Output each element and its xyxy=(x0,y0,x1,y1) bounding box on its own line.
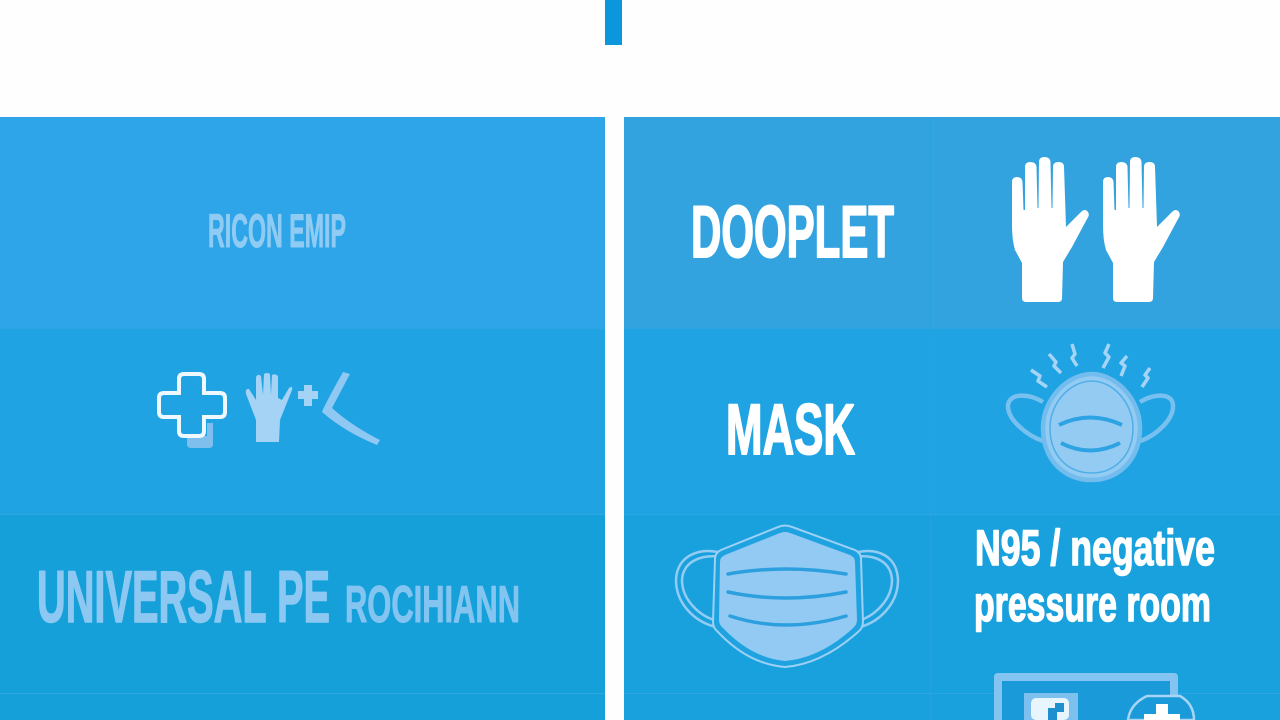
right row 1 background xyxy=(624,117,1280,328)
icon: mask folds xyxy=(1059,418,1122,450)
text: N95 and negative pressure room xyxy=(974,520,1215,632)
icon: hand xyxy=(246,373,292,442)
icon: mask pleats xyxy=(728,569,846,625)
heading: mask: MASK xyxy=(726,391,855,470)
left row 2 background xyxy=(0,328,605,514)
left row 3 background xyxy=(0,514,605,693)
right row 2 background xyxy=(624,328,1280,514)
icon group: cross, hand, plus and arm xyxy=(159,372,380,448)
icon: mask body xyxy=(719,532,857,661)
panel: right column xyxy=(624,117,1280,720)
left row 1 background xyxy=(0,117,605,328)
icon: ear straps xyxy=(676,551,898,627)
panel: left column: RICON EMIP xyxy=(208,204,346,257)
icon: surgical mask xyxy=(676,526,898,667)
icon: shadow square xyxy=(187,423,213,448)
right row 4 background xyxy=(624,693,1280,720)
icon: pair of gloves xyxy=(1012,157,1180,302)
top centre tab xyxy=(605,0,622,45)
icon: left glove xyxy=(1012,157,1089,302)
icon: respirator with vapour xyxy=(1008,344,1173,480)
icon: ear loops xyxy=(1008,396,1173,441)
panel: left column xyxy=(0,117,605,720)
left row 4 background xyxy=(0,693,605,720)
heading: smaller faded word: ROCIHIANN xyxy=(345,576,520,634)
heading: universal precautions: UNIVERSAL PE xyxy=(37,557,330,638)
right row 3 background xyxy=(624,514,1280,693)
icon: vapour squiggles xyxy=(1031,344,1150,387)
icon: mask body xyxy=(1043,374,1140,480)
heading: droplet: DOOPLET xyxy=(691,192,894,273)
icon: picture tile xyxy=(1024,693,1078,720)
icon: boomerang arm xyxy=(322,372,380,445)
icon: medical cross badge xyxy=(1128,696,1194,720)
icon: right glove xyxy=(1103,157,1180,302)
icon: inner seam xyxy=(1050,381,1133,473)
icon: small plus xyxy=(298,385,318,406)
icon: room frame xyxy=(994,673,1178,720)
icon: outer outline xyxy=(713,526,863,667)
icon: outlined cross xyxy=(159,374,225,436)
icon: isolation room frame xyxy=(994,673,1194,720)
